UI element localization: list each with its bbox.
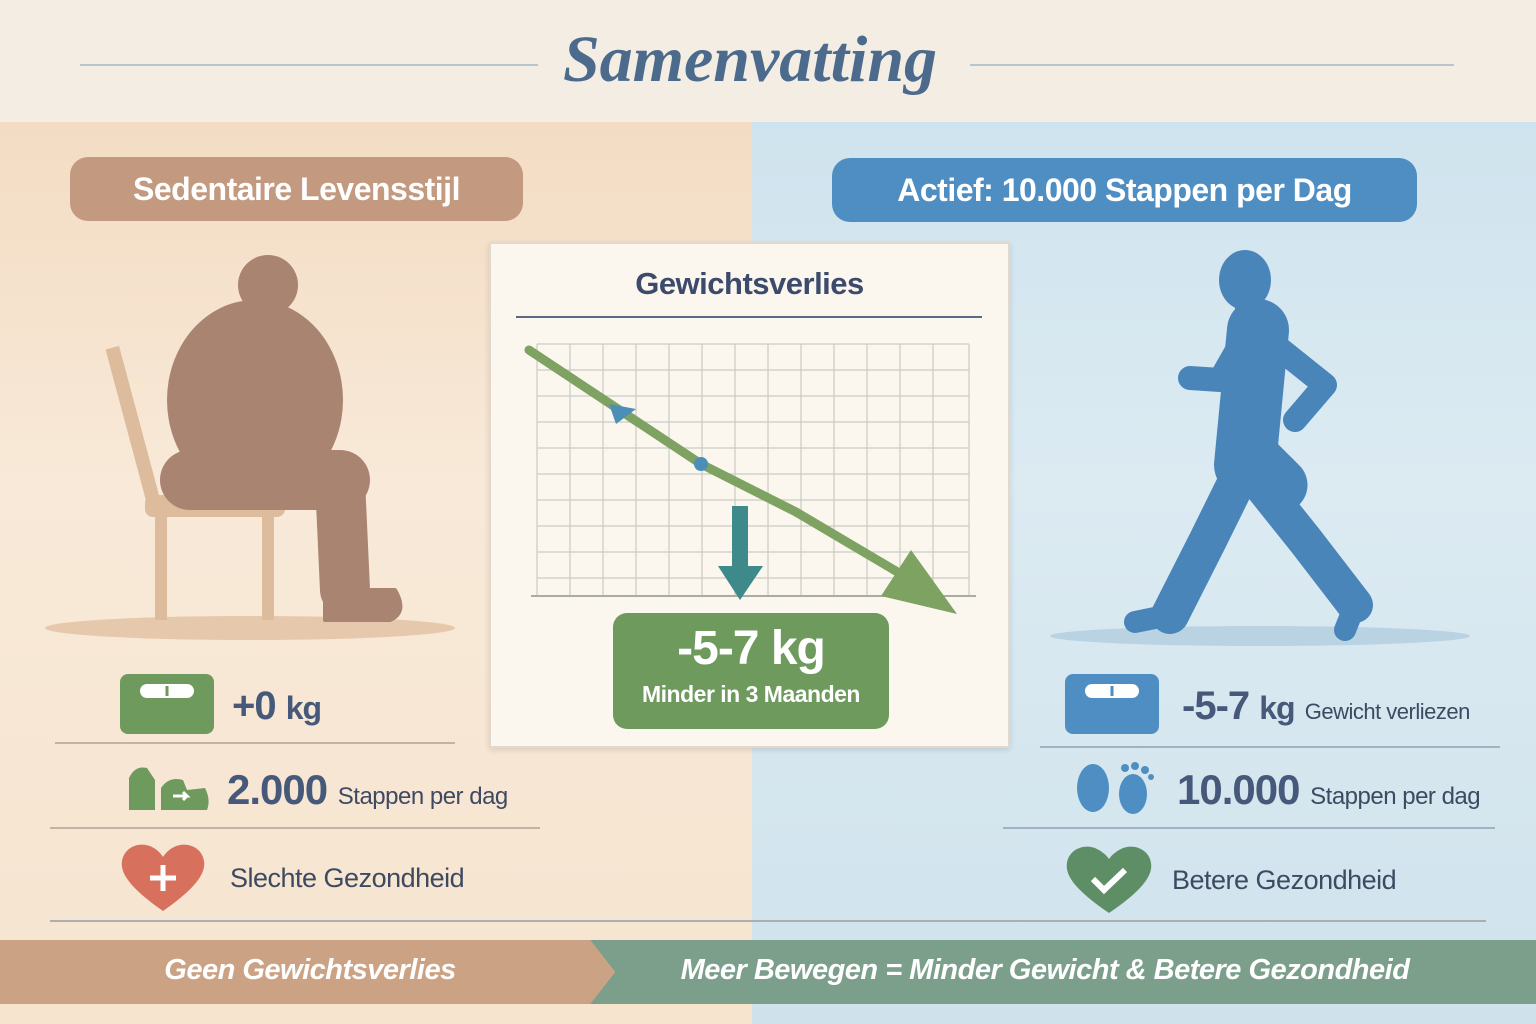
callout: -5-7 kg: -5-7 kg	[677, 622, 825, 675]
stat: right health: Betere Gezondheid	[1172, 865, 1396, 895]
chart	[516, 316, 982, 614]
stat: left steps: 2.000 Stappen per dag	[227, 766, 508, 813]
icon: shoes	[129, 768, 209, 810]
banner: bottom	[0, 940, 1536, 1004]
pill: sedentary: Sedentaire Levensstijl	[133, 171, 460, 207]
icon: red heart	[122, 844, 204, 911]
icon: scale	[120, 674, 214, 734]
stat: left weight	[120, 674, 321, 734]
illustration: walking man	[1050, 250, 1470, 646]
background right	[752, 122, 1536, 1024]
background left	[0, 122, 752, 1024]
pill: active: Actief: 10.000 Stappen per Dag	[897, 172, 1352, 208]
banner: bottom: Geen Gewichtsverlies	[164, 954, 456, 986]
banner: bottom: Meer Bewegen = Minder Gewicht & Betere Gezondheid	[681, 954, 1409, 986]
title: Samenvatting	[563, 23, 937, 96]
stat: right weight: -5-7 kg Gewicht verliezen	[1182, 684, 1470, 728]
stat: right steps	[1077, 762, 1480, 814]
stat: left health: Slechte Gezondheid	[230, 863, 464, 893]
stat: right weight	[1065, 674, 1470, 734]
illustration: seated man	[45, 255, 455, 640]
stat: left health	[122, 844, 464, 911]
icon: blue scale	[1065, 674, 1159, 734]
pill: sedentary	[70, 157, 523, 221]
stat: right steps: 10.000 Stappen per dag	[1177, 766, 1480, 813]
icon: footprints	[1077, 762, 1154, 814]
callout: -5-7 kg	[613, 613, 889, 729]
chart title: Gewichtsverlies	[635, 266, 864, 301]
icon: green heart	[1066, 846, 1152, 913]
stat: right health	[1066, 846, 1396, 913]
panel: weight loss chart	[489, 242, 1010, 748]
stat: left weight: +0 kg	[232, 684, 321, 728]
callout: -5-7 kg: Minder in 3 Maanden	[642, 681, 860, 707]
pill: active	[832, 158, 1417, 222]
